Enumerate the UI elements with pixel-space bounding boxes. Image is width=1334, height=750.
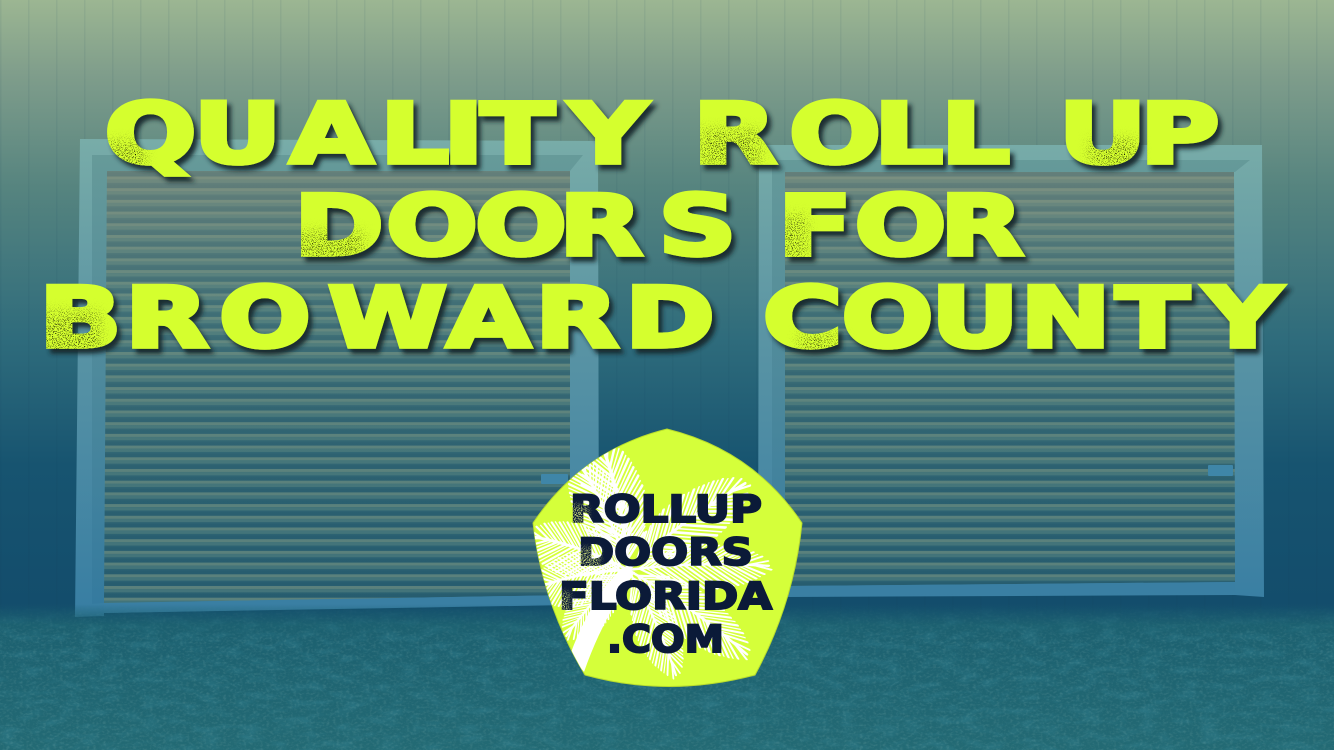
logo badge <box>518 429 802 686</box>
left door bottom rail <box>104 595 570 613</box>
left door header lip <box>92 155 583 604</box>
title distress texture <box>46 120 1148 350</box>
title distress texture: DOORS FOR <box>294 178 1023 275</box>
title: DOORS FOR <box>294 178 1023 275</box>
logo text distress texture: ROLLUP <box>570 488 762 531</box>
left door slats <box>104 171 570 603</box>
logo text distress texture: FLORIDA <box>559 575 772 618</box>
right door frame <box>758 145 1264 598</box>
logo text distress texture: DOORS <box>578 531 753 574</box>
left door frame <box>75 139 599 617</box>
right door bottom rail <box>785 582 1235 596</box>
grass foreground <box>0 604 1334 750</box>
title: QUALITY ROLL UP <box>105 86 1219 183</box>
logo text: DOORS <box>578 531 753 574</box>
title <box>39 86 1283 367</box>
title distress texture: QUALITY ROLL UP <box>105 86 1219 183</box>
logo text distress texture <box>562 500 604 610</box>
logo text <box>559 488 772 661</box>
title: BROWARD COUNTY <box>39 270 1283 367</box>
left door latch <box>541 474 568 484</box>
right door latch <box>1208 465 1233 476</box>
right door slats <box>785 172 1235 586</box>
right roll up door <box>758 145 1264 598</box>
left roll up door <box>75 139 599 617</box>
logo text: ROLLUP <box>570 488 762 531</box>
badge shape <box>533 429 802 686</box>
logo text: .COM <box>607 618 724 661</box>
logo text: FLORIDA <box>559 575 772 618</box>
title distress texture: BROWARD COUNTY <box>39 270 1283 367</box>
right door header lip <box>772 160 1250 587</box>
icon: palm tree <box>534 448 773 680</box>
